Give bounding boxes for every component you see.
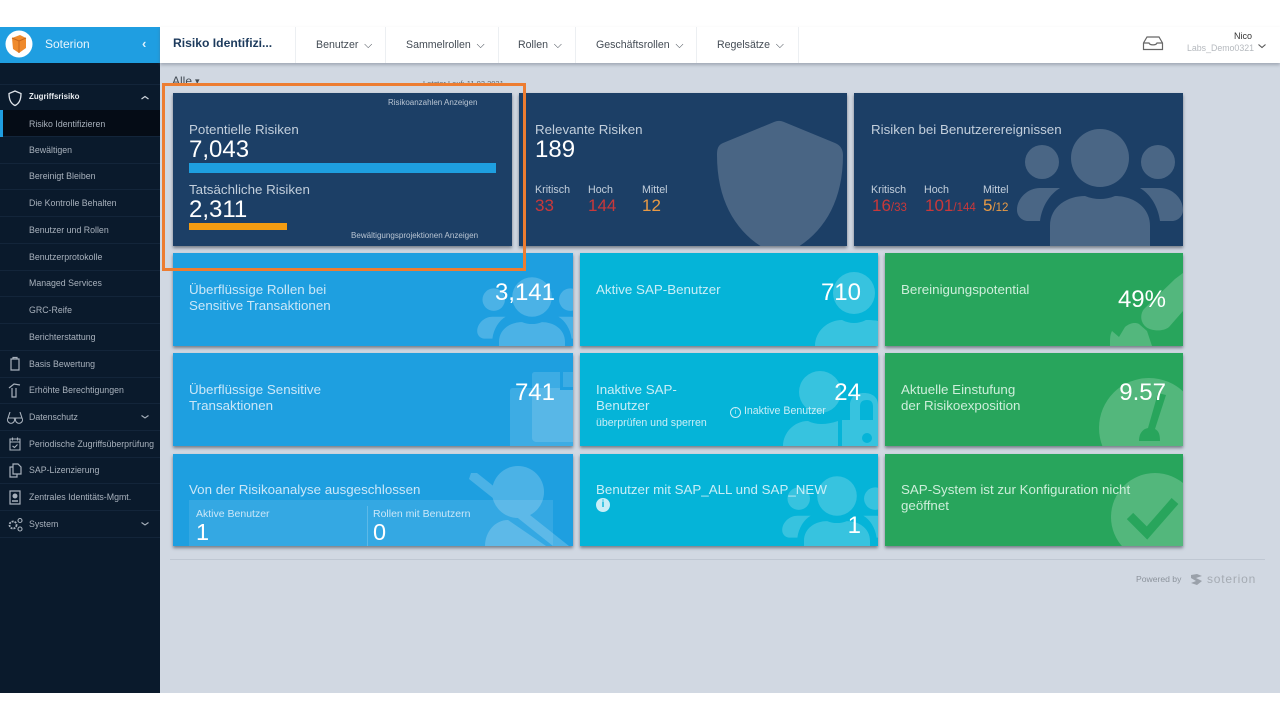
heading: SAP-System ist zur Konfiguration nicht geöffnet xyxy=(901,482,1130,513)
nav item: Geschäftsrollen: Geschäftsrollen ⌵ xyxy=(596,39,684,51)
menu item: Zentrales Identitäts-Mgmt.: Zentrales Identitäts-Mgmt. xyxy=(29,492,131,502)
value: 12: 12 xyxy=(642,196,661,215)
icon: user group xyxy=(477,277,573,346)
heading: Inaktive SAP-Benutzer: Inaktive SAP- xyxy=(596,382,677,397)
top navigation bar xyxy=(160,27,1280,63)
label: Mittel: Mittel xyxy=(983,184,1009,196)
value: 189: 189 xyxy=(535,136,575,163)
menu item: Managed Services xyxy=(0,270,160,297)
bar: potential risks xyxy=(189,163,496,173)
panel: Benutzer mit SAP_ALL und SAP_NEW xyxy=(580,454,878,546)
nav item: Regelsätze: Regelsätze ⌵ xyxy=(717,39,784,51)
heading: Potentielle Risiken: Potentielle Risiken xyxy=(189,122,299,137)
value: 7,043: 7,043 xyxy=(189,136,249,163)
heading: Bereinigungspotential: Bereinigungspotential xyxy=(901,282,1029,297)
collapse arrow: ‹ xyxy=(142,36,146,51)
heading: Benutzer mit SAP_ALL und SAP_NEW: Benutzer mit SAP_ALL und SAP_NEW xyxy=(596,482,827,497)
link: Inaktive Benutzer: Inaktive Benutzer xyxy=(744,405,826,417)
sidebar xyxy=(0,27,160,693)
filter dropdown: Alle ▾ xyxy=(172,74,200,88)
bar: actual risks xyxy=(189,223,287,230)
heading: SAP-System ist zur Konfiguration nicht geöffnet: SAP-System ist zur Konfiguration nicht xyxy=(901,482,1130,497)
heading: Überflüssige Sensitive Transaktionen: Transaktionen xyxy=(189,398,273,413)
panel: Von der Risikoanalyse ausgeschlossen xyxy=(173,454,573,546)
heading: Aktive SAP-Benutzer: Aktive SAP-Benutzer xyxy=(596,282,721,297)
panel: Bereinigungspotential xyxy=(885,253,1183,346)
menu item: Periodische Zugriffsüberprüfung: Periodische Zugriffsüberprüfung xyxy=(29,439,154,449)
menu item: Risiko Identifizieren (active) xyxy=(0,110,160,137)
menu item: Periodische Zugriffsüberprüfung xyxy=(0,431,160,458)
label: Rollen mit Benutzern: Rollen mit Benutzern xyxy=(373,508,470,520)
link: Bewältigungsprojektionen Anzeigen: Bewältigungsprojektionen Anzeigen xyxy=(351,231,478,240)
sidebar brand header xyxy=(0,27,160,63)
menu item: Basis Bewertung xyxy=(0,351,160,378)
callout: orange highlight box xyxy=(162,83,526,271)
heading: Aktuelle Einstufung der Risikoexposition: Aktuelle Einstufung xyxy=(901,382,1015,397)
label: Mittel: Mittel xyxy=(642,184,668,196)
menu item: Zugriffsrisiko xyxy=(0,84,160,111)
panel: Überflüssige Rollen xyxy=(173,253,573,346)
menu item: SAP-Lizenzierung xyxy=(0,457,160,484)
menu item: Erhöhte Berechtigungen xyxy=(0,377,160,404)
menu item: Datenschutz xyxy=(0,404,160,431)
menu item: GRC-Reife: GRC-Reife xyxy=(29,305,72,315)
menu item: Zugriffsrisiko: Zugriffsrisiko xyxy=(29,92,79,101)
label: Kritisch: Kritisch xyxy=(871,184,906,196)
value: 101/144: 101/144 xyxy=(925,196,976,215)
subtext: überprüfen und sperren: überprüfen und sperren xyxy=(596,417,707,429)
link: Inaktive Benutzer: i xyxy=(735,409,736,416)
menu item: Erhöhte Berechtigungen: Erhöhte Berechtigungen xyxy=(29,385,124,395)
label: Aktive Benutzer: Aktive Benutzer xyxy=(196,508,270,520)
heading: Von der Risikoanalyse ausgeschlossen: Von der Risikoanalyse ausgeschlossen xyxy=(189,482,420,497)
heading: Inaktive SAP-Benutzer xyxy=(596,382,677,413)
panel: Aktuelle Einstufung der Risikoexposition xyxy=(885,353,1183,446)
heading: Inaktive SAP-Benutzer: Benutzer xyxy=(596,398,649,413)
value: 3,141: 3,141 xyxy=(495,279,555,306)
menu item: Benutzer und Rollen xyxy=(0,217,160,244)
brand name: Soterion xyxy=(45,37,90,51)
value: 1: 1 xyxy=(196,519,209,545)
icon: inbox xyxy=(1142,36,1164,50)
icon: soterion mark xyxy=(1191,574,1202,585)
label: Hoch: Hoch xyxy=(924,184,949,196)
value: 49%: 49% xyxy=(1118,286,1166,313)
icon: Soterion logo xyxy=(6,30,32,58)
user tenant: Labs_Demo0321 xyxy=(1187,43,1254,53)
panel: Überflüssige Sensitive Transaktionen xyxy=(173,353,573,446)
menu item: Bewältigen xyxy=(0,137,160,164)
nav item: Sammelrollen: Sammelrollen ⌵ xyxy=(406,39,485,51)
page title in navigation bar: Risiko Identifizi... xyxy=(173,36,272,50)
icon: info xyxy=(596,498,610,512)
heading: Relevante Risiken: Relevante Risiken xyxy=(535,122,643,137)
heading: Aktuelle Einstufung der Risikoexposition: der Risikoexposition xyxy=(901,398,1020,413)
menu item: System: System xyxy=(29,519,58,529)
panel: SAP-System Konfiguration xyxy=(885,454,1183,546)
icon: excluded user xyxy=(469,466,569,546)
value: 9.57: 9.57 xyxy=(1119,379,1166,406)
heading: Überflüssige Rollen bei Sensitive Transaktionen: Überflüssige Rollen bei xyxy=(189,282,326,297)
menu item: Bereinigt Bleiben xyxy=(0,163,160,190)
heading: Überflüssige Sensitive Transaktionen xyxy=(189,382,321,413)
value: 0: 0 xyxy=(373,519,386,545)
user menu arrow xyxy=(1258,44,1266,48)
heading: Überflüssige Sensitive Transaktionen: Überflüssige Sensitive xyxy=(189,382,321,397)
menu item: Benutzer und Rollen: Benutzer und Rollen xyxy=(29,225,109,235)
heading: Überflüssige Rollen bei Sensitive Transaktionen: Sensitive Transaktionen xyxy=(189,298,331,313)
value: 2,311: 2,311 xyxy=(189,196,247,223)
icon: info: i xyxy=(602,499,604,510)
label: Kritisch: Kritisch xyxy=(535,184,570,196)
menu item: Risiko Identifizieren (active): Risiko Identifizieren xyxy=(29,119,105,129)
heading: Risiken bei Benutzerereignissen: Risiken bei Benutzerereignissen xyxy=(871,122,1062,137)
nav item: Rollen: Rollen ⌵ xyxy=(518,39,562,51)
value: 1: 1 xyxy=(848,512,861,539)
menu item: Berichterstattung: Berichterstattung xyxy=(29,332,96,342)
menu item: Zentrales Identitäts-Mgmt. xyxy=(0,484,160,511)
value: 741: 741 xyxy=(515,379,555,406)
icon: check mark xyxy=(1111,473,1183,546)
menu item: Bewältigen: Bewältigen xyxy=(29,145,72,155)
footer: powered by xyxy=(1136,572,1256,586)
value: 16/33: 16/33 xyxy=(872,196,907,215)
menu item: Basis Bewertung: Basis Bewertung xyxy=(29,359,95,369)
panel: Inaktive SAP-Benutzer xyxy=(580,353,878,446)
menu item: Managed Services: Managed Services xyxy=(29,278,102,288)
link: Risikoanzahlen Anzeigen: Risikoanzahlen Anzeigen xyxy=(388,98,477,107)
panel: Potentielle Risiken xyxy=(173,93,512,246)
panel: Relevante Risiken xyxy=(519,93,847,246)
divider xyxy=(367,506,368,546)
menu item: Benutzerprotokolle xyxy=(0,244,160,271)
heading: Aktuelle Einstufung der Risikoexposition xyxy=(901,382,1020,413)
panel: Aktive SAP-Benutzer xyxy=(580,253,878,346)
icon: user group xyxy=(1017,129,1183,246)
icon: broom xyxy=(1110,273,1183,346)
value: 710: 710 xyxy=(821,279,861,306)
footer divider xyxy=(170,559,1265,560)
nav item: Benutzer: Benutzer ⌵ xyxy=(316,39,372,51)
menu item: Die Kontrolle Behalten: Die Kontrolle Behalten xyxy=(29,198,117,208)
icon: shield xyxy=(717,121,843,246)
menu item: System xyxy=(0,511,160,538)
user name: Nico xyxy=(1234,31,1252,41)
icon: documents xyxy=(510,372,573,446)
value: 33: 33 xyxy=(535,196,554,215)
icon: gauge xyxy=(1099,378,1183,446)
stats strip xyxy=(189,500,553,546)
menu item: Berichterstattung xyxy=(0,324,160,351)
menu item: Datenschutz: Datenschutz xyxy=(29,412,78,422)
heading: SAP-System ist zur Konfiguration nicht geöffnet: geöffnet xyxy=(901,498,949,513)
heading: Tatsächliche Risiken: Tatsächliche Risiken xyxy=(189,182,310,197)
panel: Risiken bei Benutzerereignissen xyxy=(854,93,1183,246)
menu item: Bereinigt Bleiben: Bereinigt Bleiben xyxy=(29,171,96,181)
menu item: SAP-Lizenzierung: SAP-Lizenzierung xyxy=(29,465,99,475)
icon: user group xyxy=(782,476,878,546)
icon: user xyxy=(815,272,878,346)
menu item: GRC-Reife xyxy=(0,297,160,324)
text: Powered by: Powered by xyxy=(1136,574,1181,584)
icon: user with lock xyxy=(783,371,878,446)
text: soterion: soterion xyxy=(1207,572,1256,586)
value: 144: 144 xyxy=(588,196,616,215)
menu item: Benutzerprotokolle: Benutzerprotokolle xyxy=(29,252,102,262)
menu item: Die Kontrolle Behalten xyxy=(0,190,160,217)
heading: Überflüssige Rollen bei Sensitive Transaktionen xyxy=(189,282,331,313)
last run date: Letzter Lauf: 11.03.2021 xyxy=(423,79,504,88)
value: 24: 24 xyxy=(834,379,861,406)
value: 5/12: 5/12 xyxy=(983,196,1008,215)
label: Hoch: Hoch xyxy=(588,184,613,196)
